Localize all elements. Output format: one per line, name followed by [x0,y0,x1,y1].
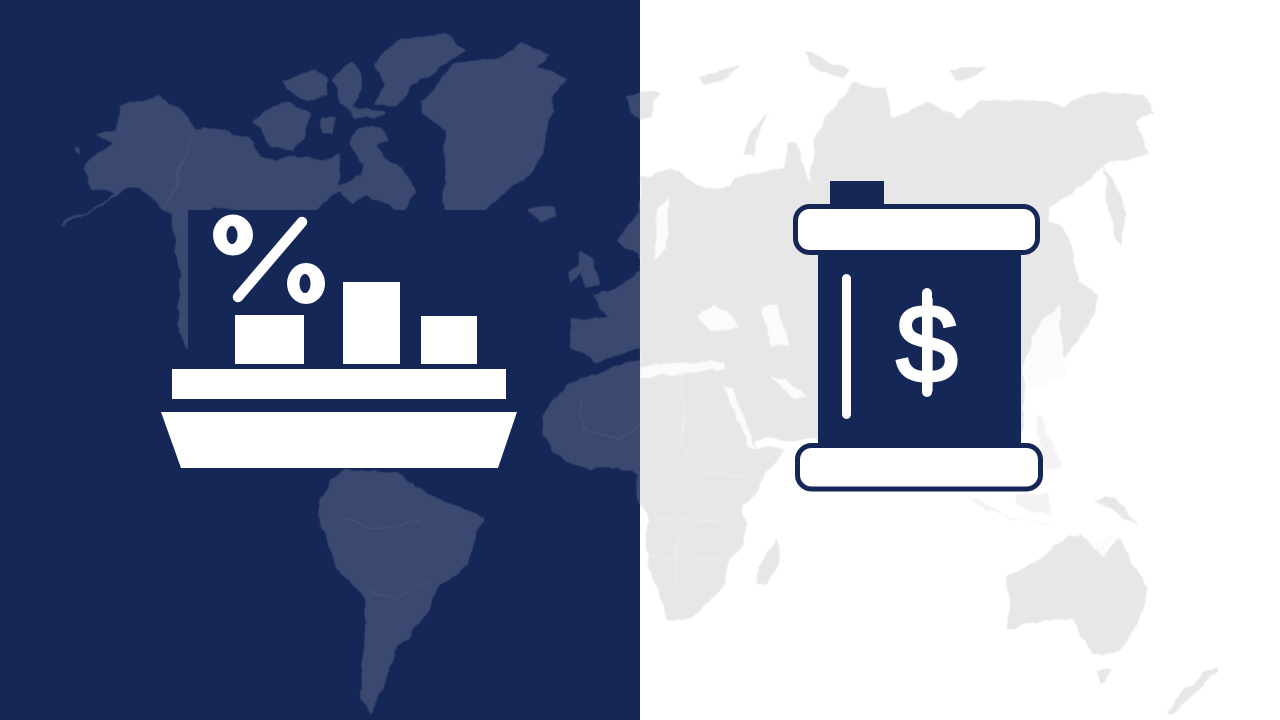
percent sign [213,214,325,304]
icon backing [188,210,505,370]
barrel highlight [842,274,851,419]
barrel body [818,250,1021,448]
bottom band [798,446,1040,489]
icon: fuel barrel with dollar sign [796,181,1040,489]
top band [796,206,1038,252]
barrel cap [830,181,884,207]
ship deck [172,369,506,399]
world map on white side [640,52,1218,715]
left navy panel [0,0,640,720]
ship hull [161,412,517,468]
cargo containers [235,282,477,364]
dollar sign: $ [896,283,958,406]
icon: cargo ship with percent sign [161,210,517,468]
world map on navy side [62,32,640,714]
